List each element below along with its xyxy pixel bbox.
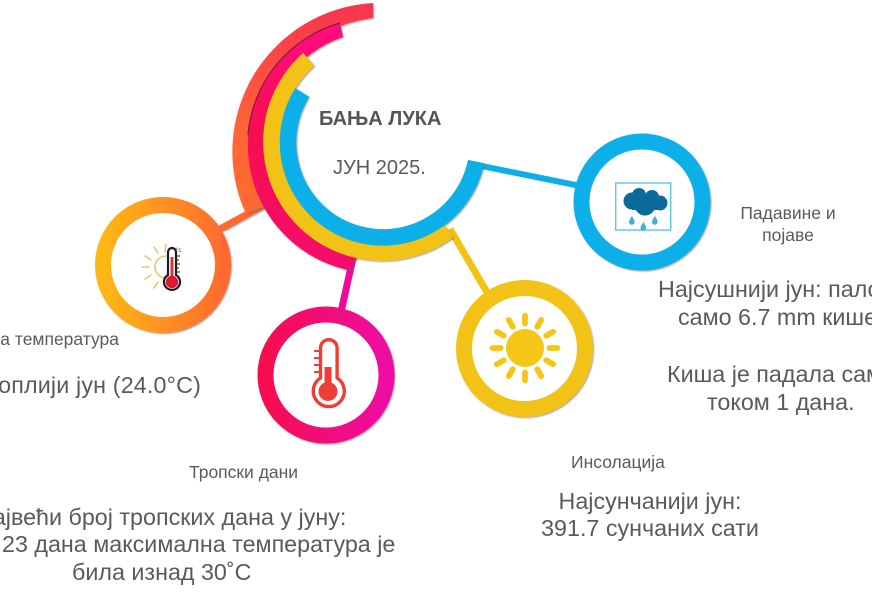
ring: precipitation xyxy=(582,142,702,262)
text: driest June: само 6.7 mm кише xyxy=(678,304,872,330)
label: tropical days: Тропски дани xyxy=(189,462,298,482)
central arcs xyxy=(232,3,476,270)
label: precipitation: Падавине и xyxy=(740,202,836,222)
connector: pink xyxy=(341,258,353,312)
icon: sun and thermometer: °c xyxy=(176,248,181,254)
connector: orange xyxy=(220,205,264,229)
icon: sun and thermometer xyxy=(142,244,181,290)
connector: blue xyxy=(472,164,578,186)
icon: rain cloud xyxy=(616,183,671,231)
ring: temperature xyxy=(103,205,223,325)
icon: sun xyxy=(492,316,558,380)
ring: insolation xyxy=(464,288,585,409)
text: tropical days: 23 дана максимална температура је xyxy=(2,530,395,556)
arc: yellow xyxy=(272,59,448,252)
label: precipitation: појаве xyxy=(762,224,814,244)
icon: thermometer xyxy=(313,340,344,407)
text: insolation xyxy=(541,488,759,541)
arc: orange xyxy=(232,3,373,214)
arc: blue xyxy=(288,92,476,237)
text: insolation: 391.7 сунчаних сати xyxy=(541,515,759,541)
text: driest June xyxy=(658,276,872,330)
title: БАЊА ЛУКА xyxy=(319,108,441,130)
text: tropical days: била изнад 30˚C xyxy=(72,558,251,584)
subtitle: ЈУН 2025. xyxy=(333,156,426,178)
arc: pink xyxy=(248,23,358,270)
text: insolation: Најсунчанији јун: xyxy=(559,488,741,514)
label: precipitation xyxy=(740,202,836,244)
connector: yellow xyxy=(450,229,488,294)
text: rain days xyxy=(667,361,872,415)
text: rain days: током 1 дана. xyxy=(707,389,855,415)
text: tropical days xyxy=(0,504,395,585)
ring: tropical days xyxy=(266,314,386,436)
label: insolation: Инсолација xyxy=(571,452,665,472)
arc edge: dark line between orange and pink xyxy=(248,23,340,135)
